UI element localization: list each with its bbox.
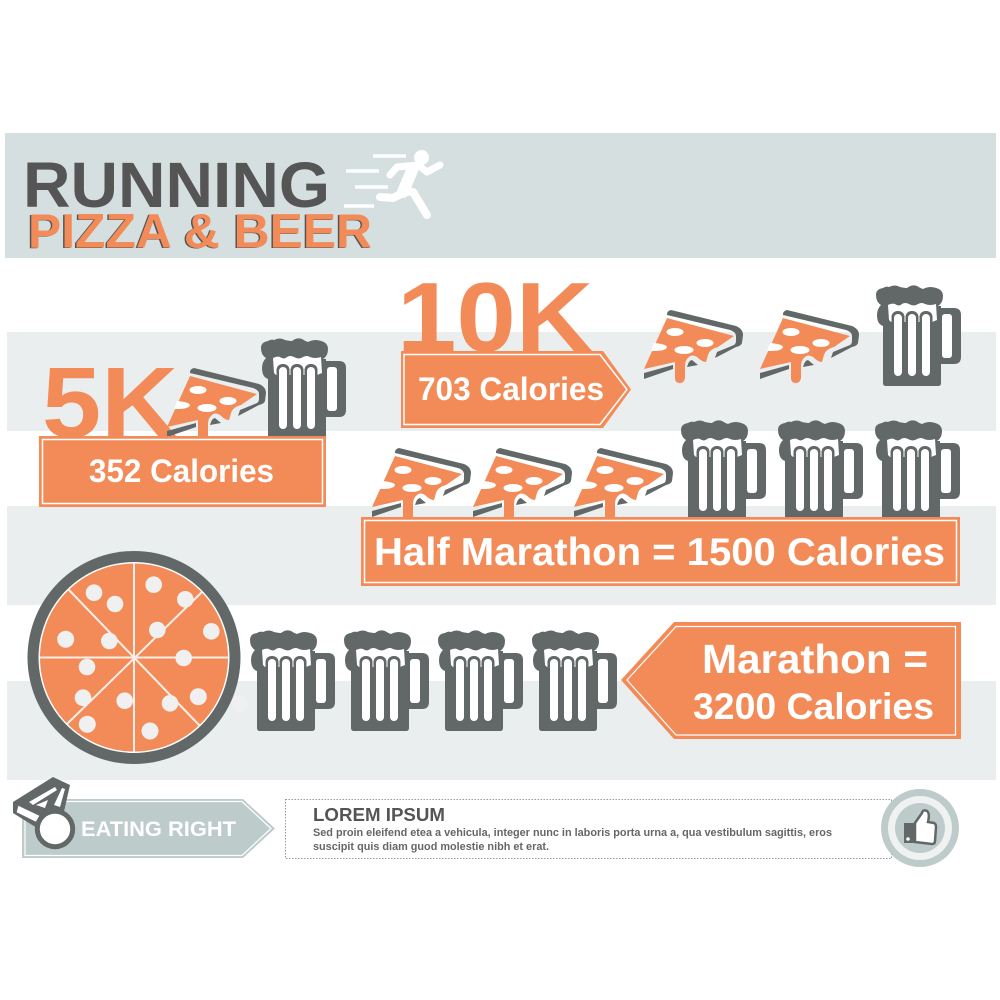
section: marathon xyxy=(28,551,961,764)
subtitle: Pizza and Beer: PIZZA & BEER xyxy=(28,206,372,258)
header panel xyxy=(5,133,996,259)
icon: beer xyxy=(261,338,346,439)
callout: marathon calories: 3200 Calories xyxy=(693,686,934,727)
callout: 352 calories xyxy=(39,436,326,507)
panel: lorem ipsum xyxy=(286,800,892,858)
icon: pizza slice xyxy=(372,448,471,521)
icon: medal xyxy=(13,777,73,847)
icon: pizza slice xyxy=(760,310,859,383)
icon: beer xyxy=(344,630,429,731)
icon: pizza slice xyxy=(473,448,572,521)
icon: beer xyxy=(778,420,863,521)
heading: LOREM IPSUM xyxy=(313,804,445,825)
body text xyxy=(313,827,832,853)
callout: 703 calories: 703 Calories xyxy=(418,371,604,407)
icon: thumbs up badge xyxy=(881,789,959,867)
icon: beer xyxy=(438,630,523,731)
title: Running: RUNNING xyxy=(23,149,330,221)
body text: Sed proin eleifend etea a vehicula, integer nunc in laboris porta urna a, qua vestibulum sagittis, eros xyxy=(313,827,832,839)
icon: pizza slice xyxy=(167,368,266,441)
callout: marathon calories xyxy=(621,622,961,739)
body text: suscipit quis diam guod molestie nibh et erat. xyxy=(313,841,549,853)
section: 5K xyxy=(39,338,346,507)
icon: pizza slice xyxy=(574,448,673,521)
callout: half marathon calories: Half Marathon = 1500 Calories xyxy=(374,531,945,574)
stray topping xyxy=(232,695,248,711)
icon: pizza slice xyxy=(644,310,743,383)
icon: beer xyxy=(681,420,766,521)
icon: beer xyxy=(875,420,960,521)
icon: beer xyxy=(532,630,617,731)
callout: half marathon calories xyxy=(361,517,960,586)
icon: whole pizza xyxy=(28,551,240,764)
heading: 10K: 10K xyxy=(397,262,593,372)
icon: beer xyxy=(250,630,335,731)
heading: 5K: 5K xyxy=(42,347,178,459)
callout: 352 calories: 352 Calories xyxy=(89,453,274,489)
section: half marathon xyxy=(361,420,960,586)
section: 10K xyxy=(397,262,961,428)
banner: eating right: EATING RIGHT xyxy=(81,818,236,841)
callout: marathon calories: Marathon = xyxy=(702,636,928,682)
banner: eating right xyxy=(22,799,275,858)
subtitle: Pizza and Beer: PIZZA & BEER xyxy=(26,206,371,259)
callout: 703 calories xyxy=(401,351,631,428)
icon: beer xyxy=(876,285,961,386)
icon: runner xyxy=(344,150,440,215)
background bands xyxy=(7,332,996,780)
